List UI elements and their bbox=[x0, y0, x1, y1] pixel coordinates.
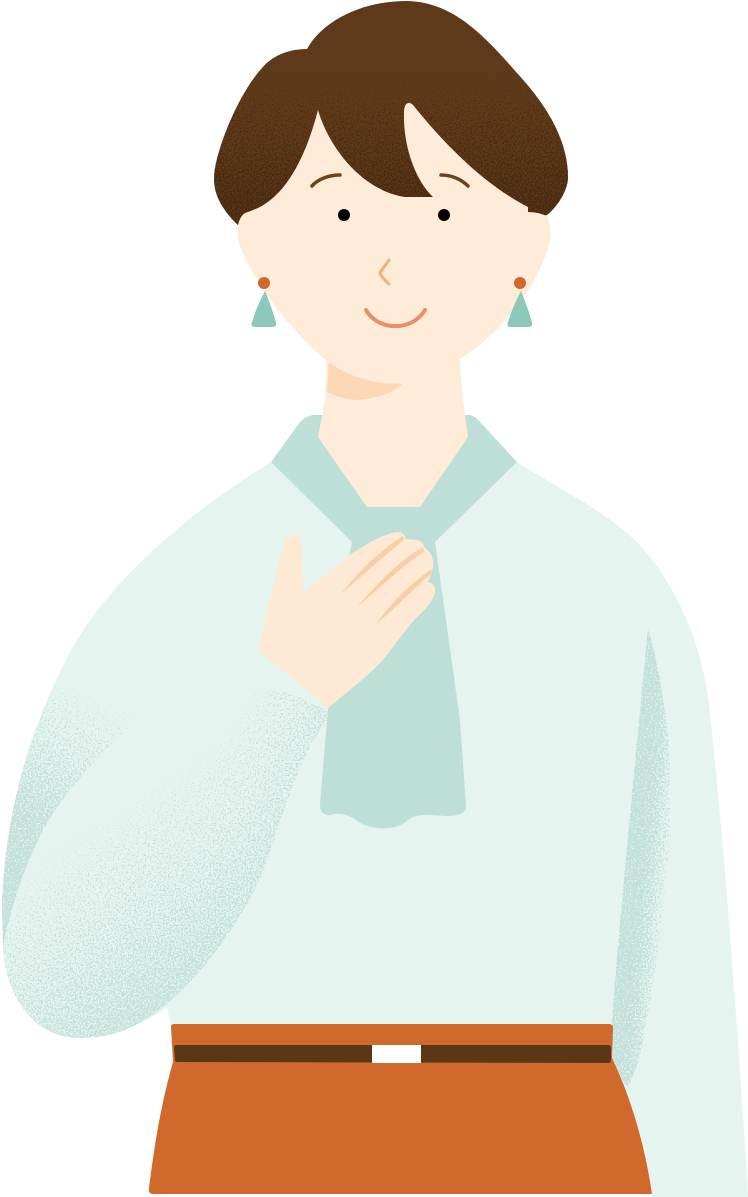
left eye bbox=[338, 209, 350, 221]
finger lines bbox=[341, 536, 432, 624]
nose bbox=[380, 260, 389, 284]
right eye bbox=[438, 209, 450, 221]
face bbox=[238, 103, 550, 384]
right earring bbox=[507, 277, 532, 327]
left sleeve lower shading bbox=[0, 680, 340, 1050]
neck bbox=[318, 340, 468, 507]
left eyebrow bbox=[312, 175, 340, 186]
blouse body bbox=[2, 462, 748, 1197]
left earring bbox=[251, 277, 276, 327]
hair bbox=[214, 1, 568, 225]
right eyebrow bbox=[441, 175, 468, 186]
right sleeve shading bbox=[612, 628, 670, 1088]
belt bbox=[174, 1045, 611, 1063]
neck shadow bbox=[327, 360, 402, 400]
scarf bbox=[271, 415, 517, 828]
mouth bbox=[366, 310, 425, 326]
skirt bbox=[149, 1024, 652, 1194]
hand bbox=[259, 532, 435, 708]
left sleeve upper shading bbox=[2, 680, 135, 946]
belt buckle bbox=[372, 1045, 421, 1063]
